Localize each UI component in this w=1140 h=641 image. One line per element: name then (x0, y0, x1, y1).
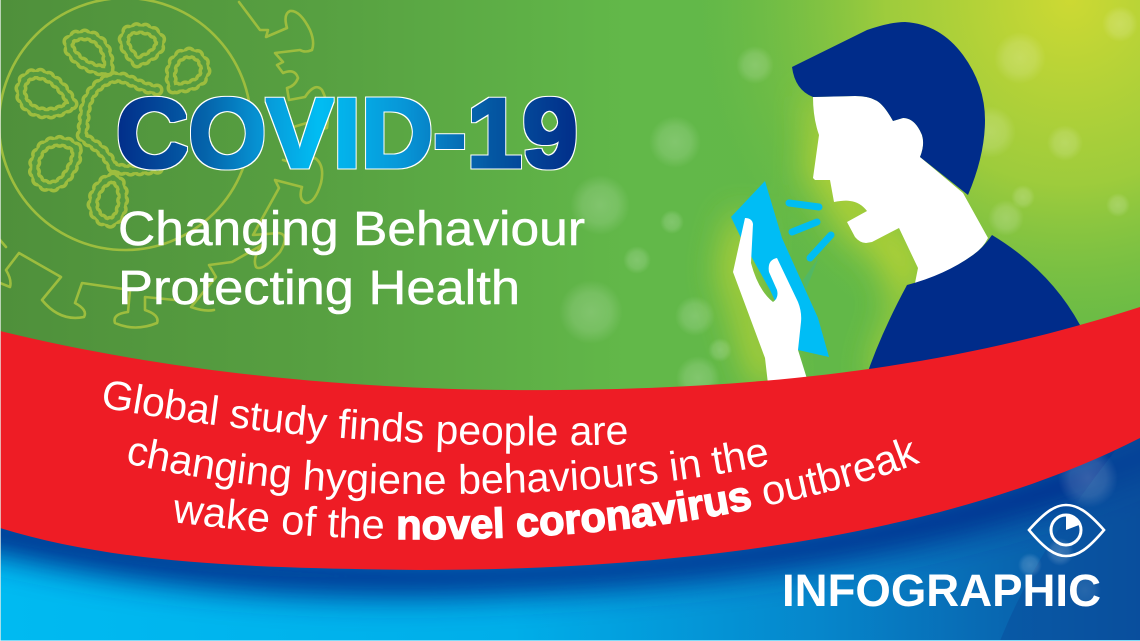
bokeh particles (559, 6, 1138, 400)
banner message line 2: changing hygiene behaviours in the (128, 438, 768, 502)
virus line illustration (0, 0, 328, 328)
virus spikes (0, 2, 328, 328)
subtitle (118, 203, 585, 315)
subtitle: Changing Behaviour (118, 203, 585, 256)
RNA petals (21, 28, 205, 222)
icon: eye (1029, 505, 1104, 556)
banner message: Global study finds people are (104, 381, 627, 454)
icon: droplet trail (803, 258, 818, 290)
icon: hair (792, 22, 985, 195)
icon: tissue (731, 181, 829, 357)
icon: hand (733, 218, 808, 384)
green background (0, 0, 1140, 400)
icon: cough lines (789, 203, 831, 258)
label: INFOGRAPHIC: INFOGRAPHIC (782, 565, 1101, 616)
virus body circle (0, 0, 251, 250)
subtitle: Protecting Health (118, 262, 520, 315)
man coughing into tissue (731, 22, 1090, 384)
title: COVID-19: COVID-19 (116, 78, 578, 188)
red curved banner (0, 307, 1140, 570)
icon: shirt (865, 235, 1090, 380)
banner message line 3: wake of the novel coronavirus outbreak (174, 439, 920, 540)
blue wave (0, 420, 1140, 641)
icon: face and neck (813, 96, 988, 283)
